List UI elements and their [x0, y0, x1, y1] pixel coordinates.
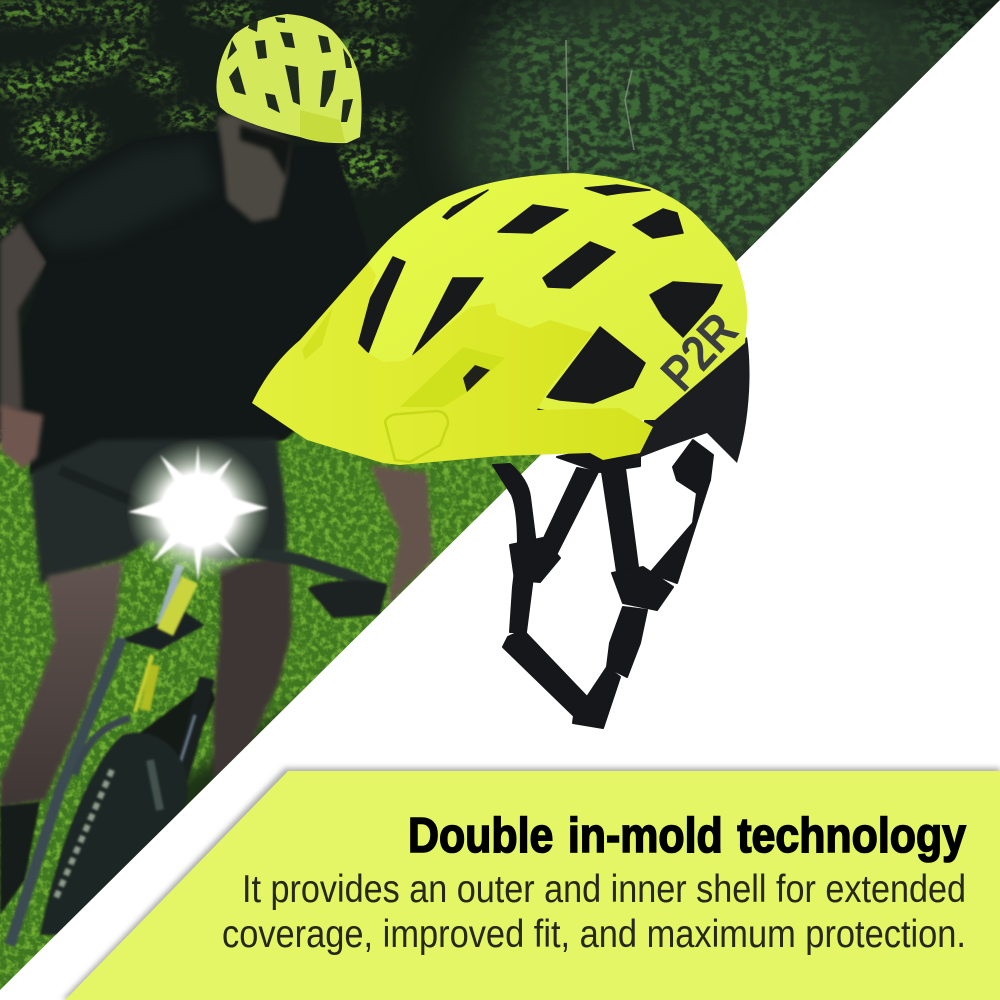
chin buckle: [573, 667, 620, 728]
bike handlebar: [233, 549, 385, 592]
black lower shell: [633, 337, 750, 463]
rider left arm: [0, 223, 47, 410]
yellow text panel shadow: [62, 768, 1000, 1000]
right strap: [650, 480, 710, 583]
visor window: [400, 347, 505, 407]
panel text: [222, 809, 966, 956]
visor side vent: [302, 307, 333, 360]
grass field: [0, 430, 560, 1000]
bike right grip: [307, 580, 387, 618]
rider shirt: [20, 130, 380, 475]
rider helmet: [216, 14, 362, 143]
centre buckle: [612, 567, 673, 610]
under shell band: [557, 440, 640, 472]
rider left hand: [0, 405, 43, 469]
rear adjuster: [673, 440, 713, 493]
pale tree trunks: [566, 40, 634, 170]
rider face: [217, 114, 290, 222]
product helmet: [252, 173, 750, 728]
visor: [252, 263, 653, 465]
visor window opening: [463, 365, 490, 392]
inner straps: [543, 468, 598, 553]
chin pad: [503, 630, 587, 715]
rider shorts: [30, 438, 287, 584]
left buckle: [510, 538, 560, 582]
visor logo: [385, 411, 448, 462]
forest foliage on the left: [0, 0, 410, 238]
left strap: [493, 464, 536, 632]
rider right arm: [370, 465, 433, 608]
rider left sock: [0, 802, 40, 915]
shell vents: [358, 185, 722, 403]
forest background: [0, 0, 1000, 520]
helmet logo text: P2R: [650, 302, 748, 402]
straps: [493, 440, 713, 728]
yellow main shell: [362, 173, 747, 420]
rider shirt upper tone: [42, 150, 206, 242]
description: [222, 868, 966, 956]
rider left leg: [0, 561, 123, 808]
bike headlight glare: [126, 438, 270, 582]
yellow text panel: [65, 771, 1000, 1000]
bike frame and wheel: [10, 565, 215, 945]
face shadow: [240, 125, 292, 178]
forest foliage on the right: [490, 5, 990, 255]
rider right leg: [213, 553, 292, 790]
